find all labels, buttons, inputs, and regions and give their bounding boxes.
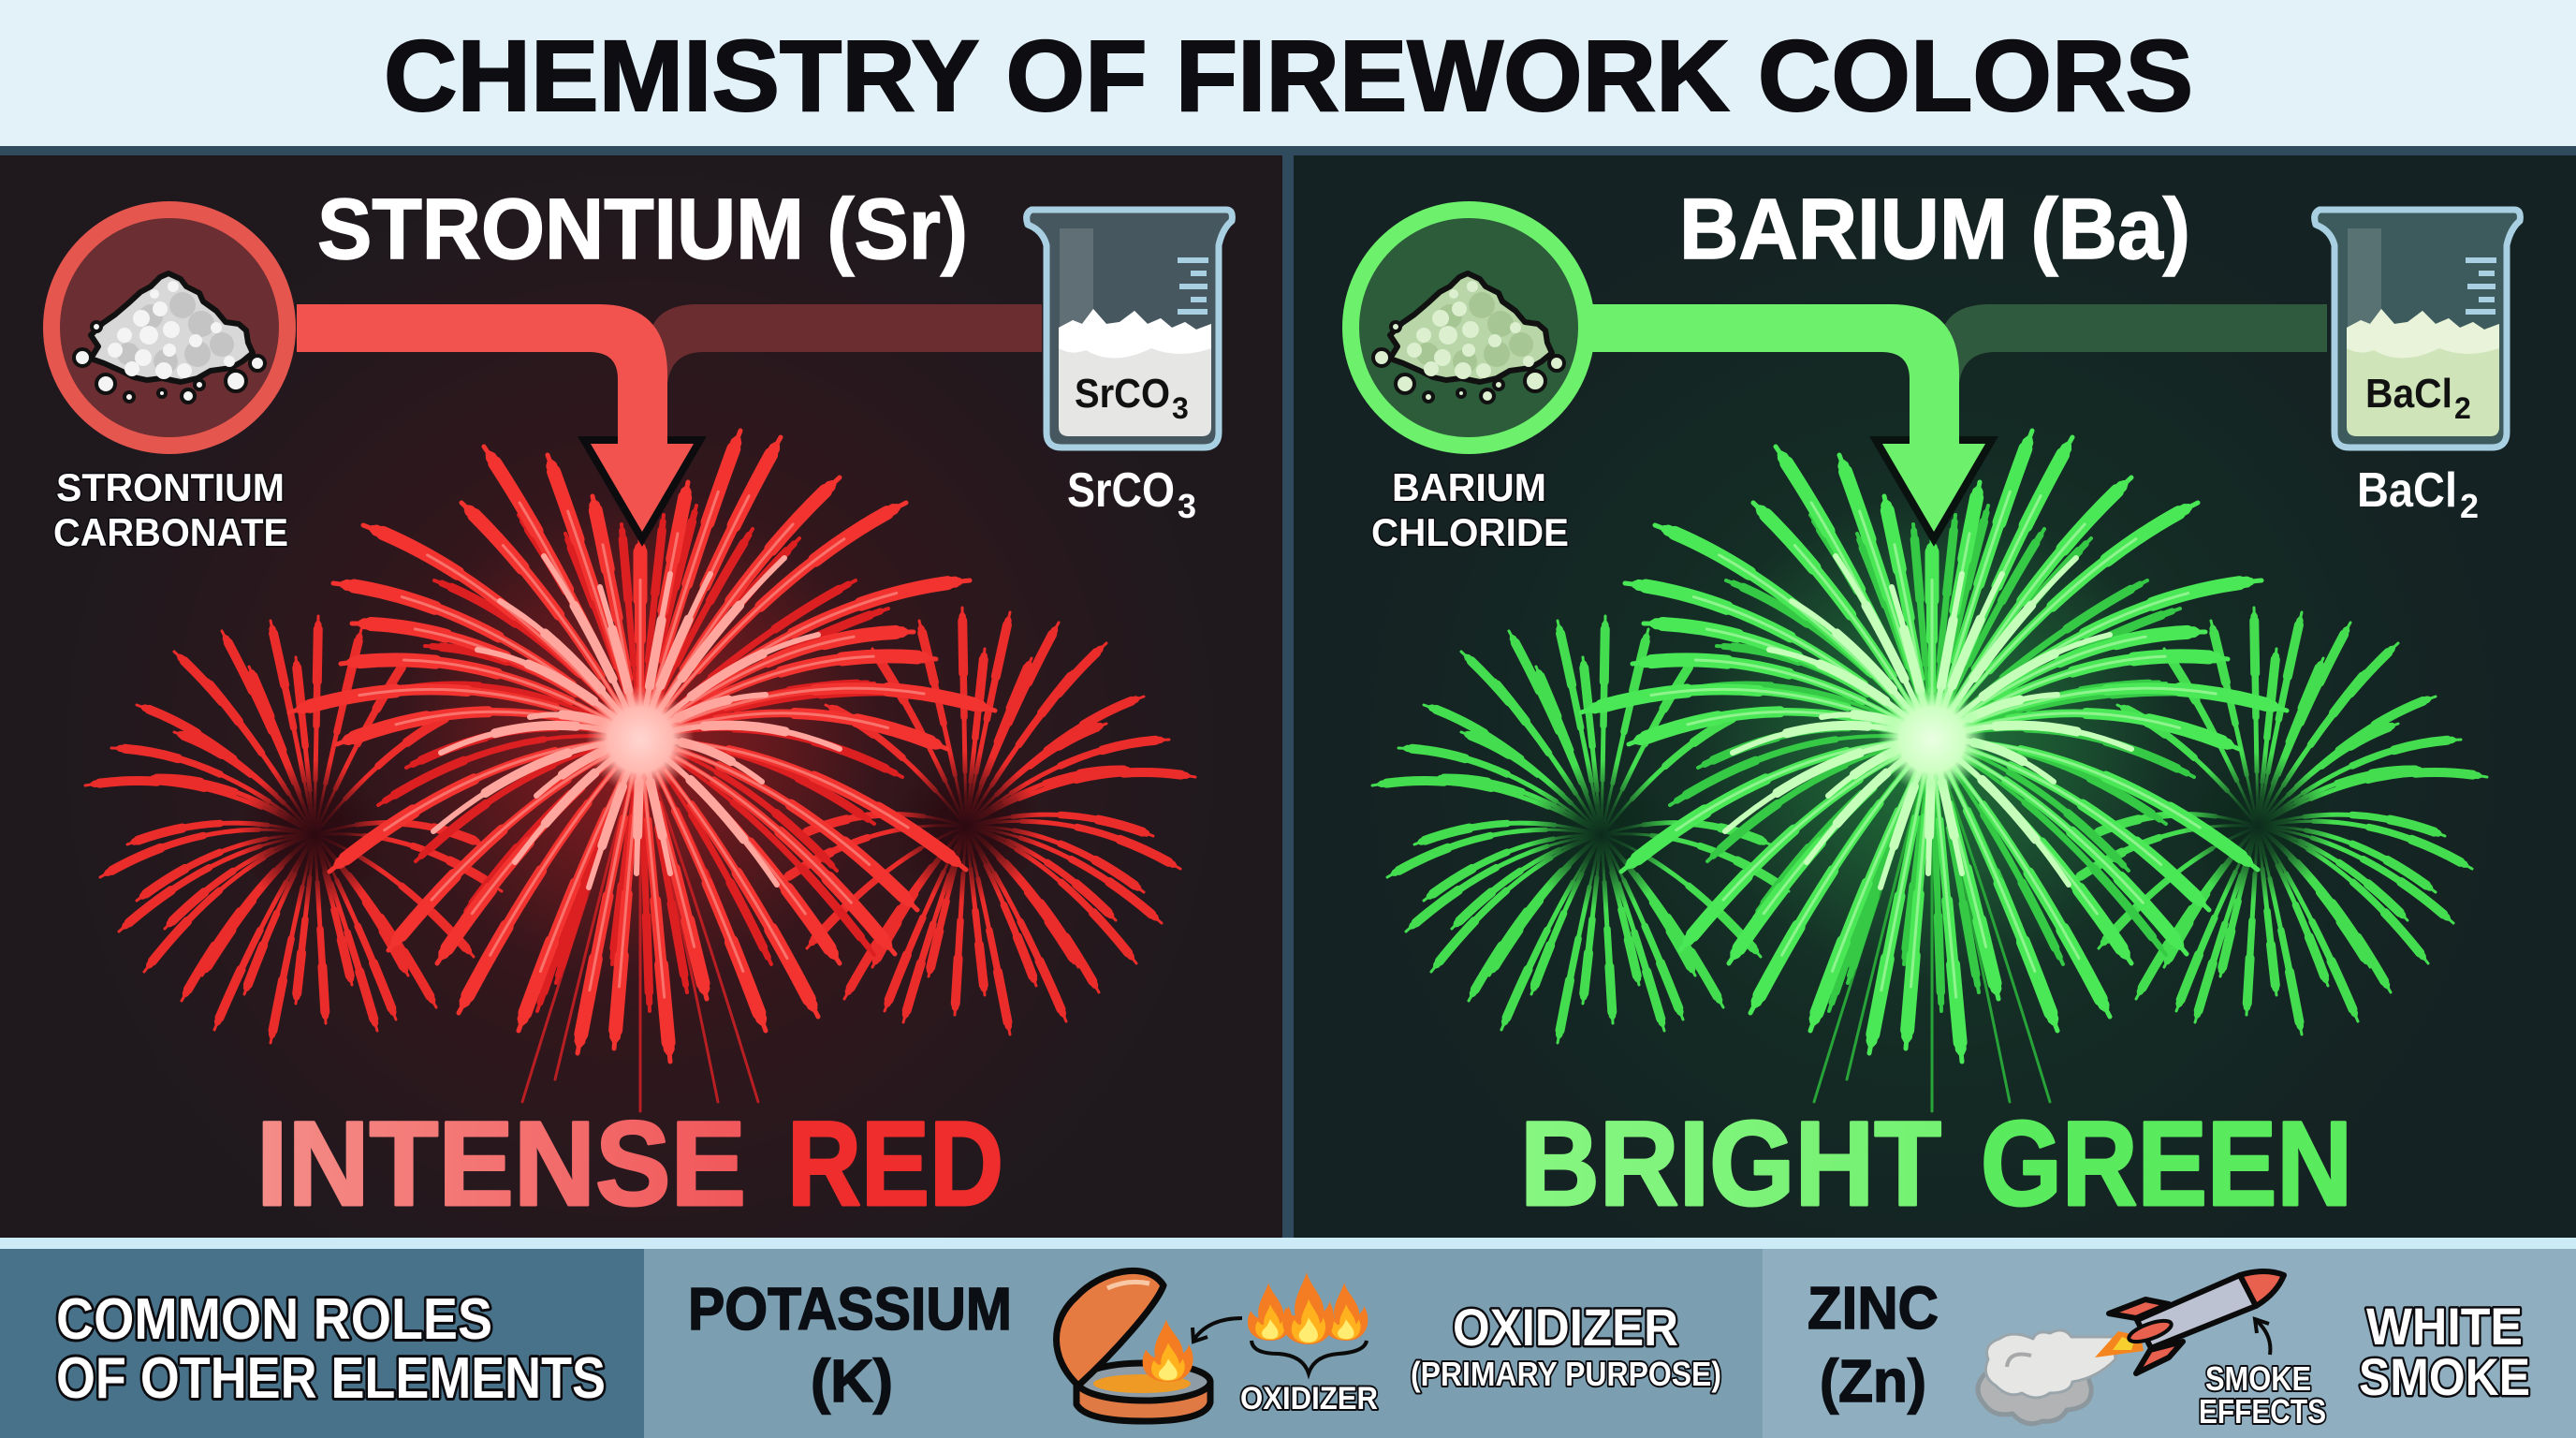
heading: common roles: COMMON ROLES: [56, 1287, 492, 1352]
icon: barium chloride powder: [1351, 210, 1587, 446]
label: potassium: (K): [811, 1347, 893, 1415]
panel: barium: [1294, 155, 2576, 1238]
firework: right small burst: [2071, 608, 2487, 1034]
result: intense red: [256, 1097, 1003, 1231]
icon: beaker SrCO3: SrCO: [1075, 371, 1170, 417]
label: white smoke: SMOKE: [2359, 1347, 2530, 1406]
bottom strip: [0, 1238, 2576, 1438]
heading: barium: BARIUM (Ba): [1679, 182, 2190, 277]
firework: left small burst: [85, 616, 502, 1043]
label: zinc: (Zn): [1820, 1347, 1926, 1415]
arrow: strontium into burst: [297, 304, 696, 532]
heading: strontium: STRONTIUM (Sr): [317, 182, 968, 277]
label: small oxidizer: OXIDIZER: [1240, 1381, 1378, 1416]
label: SrCO3: SrCO: [1067, 463, 1175, 518]
icon: beaker BaCl2: BaCl: [2365, 371, 2452, 417]
arrow head outline: [584, 440, 700, 539]
icon: beaker SrCO3: [1027, 210, 1232, 448]
icon: smoke cloud: [1978, 1330, 2115, 1424]
label: oxidizer primary purpose: OXIDIZER: [1453, 1298, 1678, 1357]
arrow: secondary source bar: [1940, 304, 2327, 384]
icon: beaker BaCl2: 2: [2454, 391, 2471, 425]
firework: right small burst: [779, 608, 1195, 1034]
title: CHEMISTRY OF FIREWORK COLORS: [384, 19, 2193, 132]
label: strontium carbonate: STRONTIUM: [56, 465, 285, 509]
label: oxidizer primary purpose: (PRIMARY PURPOSE): [1411, 1355, 1721, 1393]
label: barium chloride: [1371, 465, 1569, 554]
label: SrCO3: 3: [1178, 487, 1196, 525]
icon: beaker BaCl2: [2315, 210, 2520, 448]
result: bright green: [1520, 1097, 2352, 1231]
label: smoke effects: SMOKE: [2205, 1359, 2311, 1398]
label: BaCl2: 2: [2460, 487, 2479, 525]
result: intense red: INTENSE: [256, 1097, 746, 1231]
result: bright green: GREEN: [1981, 1097, 2352, 1231]
label: oxidizer primary purpose: [1411, 1298, 1721, 1393]
result: intense red: RED: [787, 1097, 1003, 1231]
label: potassium: POTASSIUM: [688, 1275, 1012, 1343]
firework: main green burst: [1581, 431, 2287, 1111]
label: potassium: [688, 1275, 1012, 1415]
firework: main red burst: [289, 431, 995, 1111]
panel divider: [1282, 155, 1294, 1238]
label: white smoke: WHITE: [2366, 1297, 2523, 1356]
label: smoke effects: [2199, 1359, 2326, 1431]
icon: beaker SrCO3: 3: [1172, 391, 1189, 425]
arrow head outline: [1876, 440, 1992, 539]
heading: common roles: [56, 1287, 606, 1411]
arrow: smoke effects: [2255, 1319, 2270, 1355]
label: smoke effects: EFFECTS: [2199, 1392, 2326, 1431]
label: barium chloride: BARIUM: [1392, 465, 1546, 509]
icon: strontium carbonate powder: [51, 210, 287, 446]
label: strontium carbonate: [53, 465, 288, 554]
arrow: oxidizer to dish: [1193, 1318, 1242, 1342]
label: zinc: ZINC: [1808, 1274, 1939, 1342]
icon: rocket: [2095, 1271, 2284, 1373]
arrow: barium into burst: [1588, 304, 1988, 532]
panel: strontium: [0, 155, 1282, 1238]
heading: common roles: OF OTHER ELEMENTS: [56, 1346, 606, 1411]
arrow: secondary source bar: [649, 304, 1042, 384]
icon: potassium dish with flame: [1056, 1270, 1210, 1421]
firework: left small burst: [1372, 616, 1789, 1043]
icon: oxidizer flames with brace: [1248, 1272, 1368, 1373]
title band: [0, 0, 2576, 155]
label: BaCl2: BaCl: [2357, 463, 2457, 518]
label: white smoke: [2359, 1297, 2530, 1406]
result: bright green: BRIGHT: [1520, 1097, 1941, 1231]
label: strontium carbonate: CARBONATE: [53, 510, 288, 554]
label: barium chloride: CHLORIDE: [1371, 510, 1569, 554]
label: zinc: [1808, 1274, 1939, 1415]
